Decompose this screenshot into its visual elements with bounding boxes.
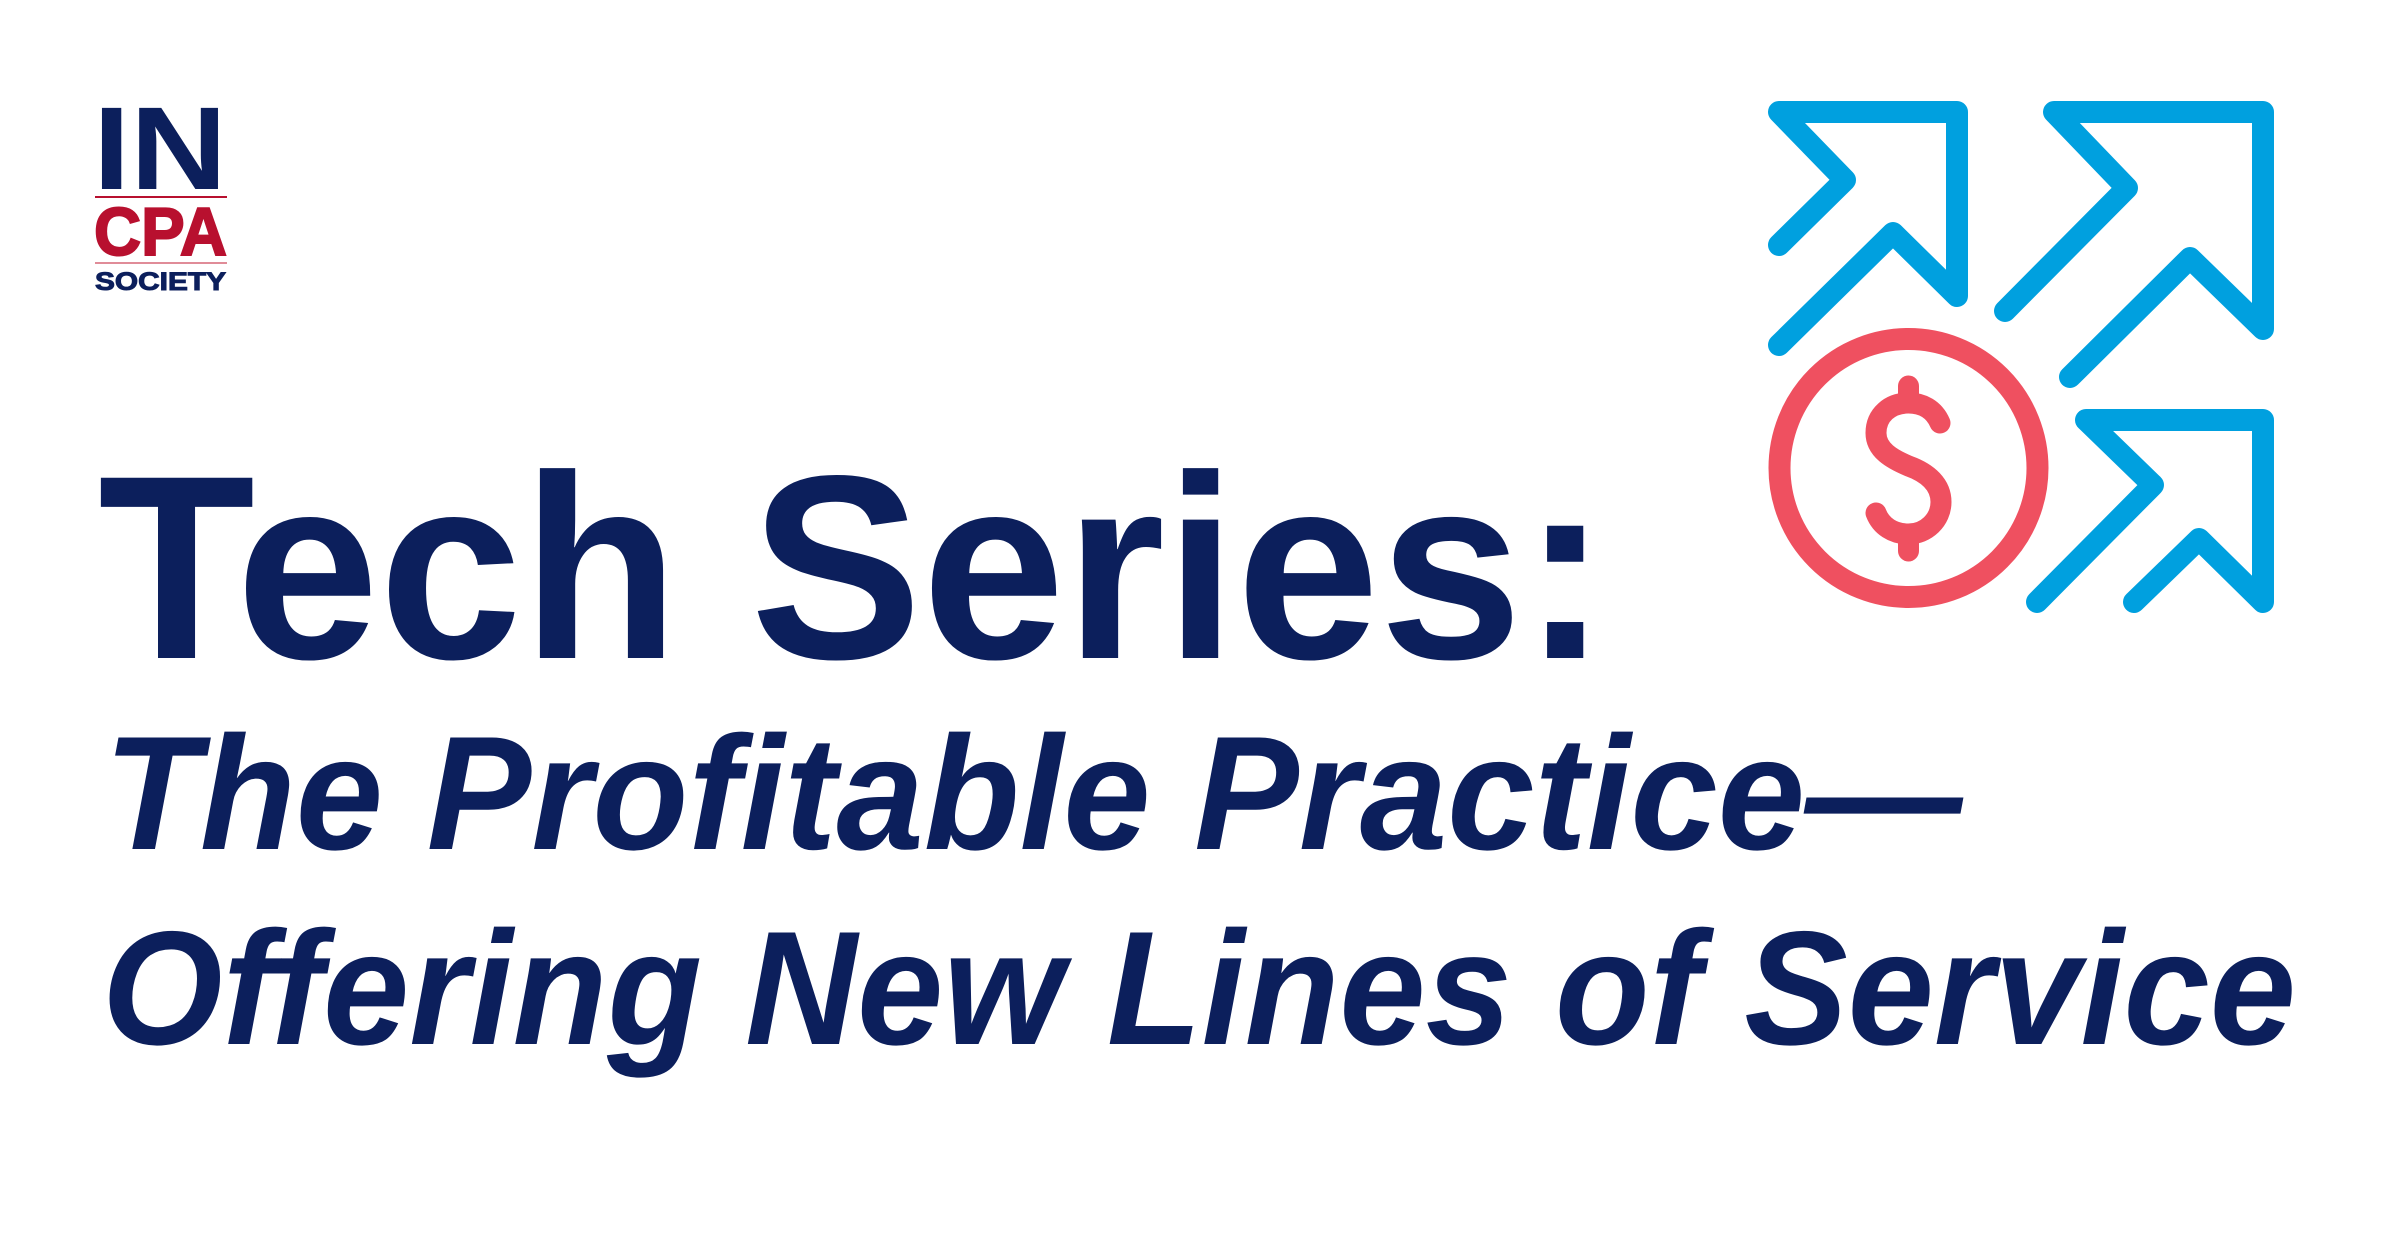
- subtitle line 1: The Profitable Practice—: [104, 703, 1964, 884]
- arrow bottom-right: [2037, 420, 2263, 602]
- arrow top-left: [1779, 112, 1957, 345]
- title: Tech Series:: [98, 421, 1608, 714]
- logo text SOCIETY: SOCIETY: [95, 268, 226, 296]
- subtitle line 2: Offering New Lines of Service: [102, 898, 2296, 1079]
- dollar sign: [1876, 386, 1941, 551]
- arrow top-right: [2005, 112, 2263, 377]
- logo: IN CPA Society: [93, 83, 227, 296]
- coin circle: [1780, 339, 2038, 597]
- logo text CPA: CPA: [94, 194, 227, 270]
- logo text IN: IN: [93, 83, 227, 215]
- icon: growth arrows with dollar coin: [1779, 112, 2263, 602]
